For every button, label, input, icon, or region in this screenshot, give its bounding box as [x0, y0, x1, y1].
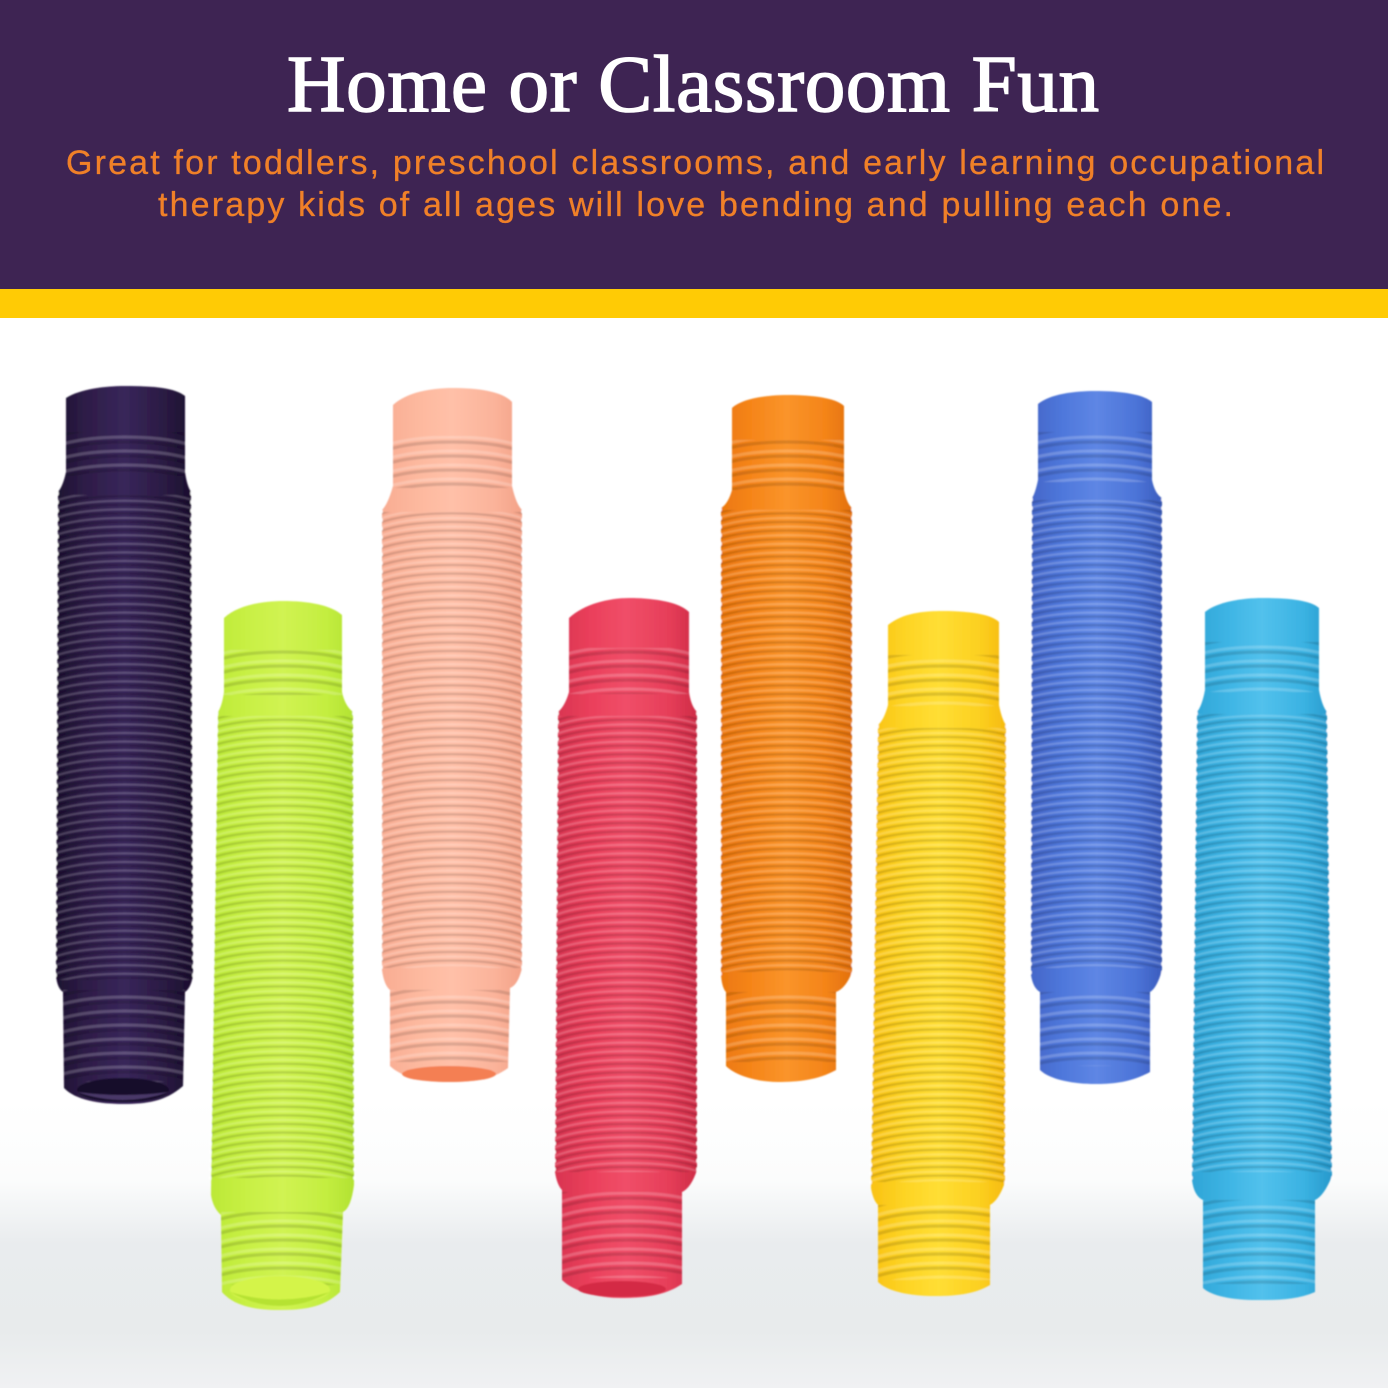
subtitle: therapy kids of all ages will love bending and pulling each one. — [158, 186, 1233, 224]
title: Home or Classroom Fun — [287, 39, 1099, 129]
subtitle: Great for toddlers, preschool classrooms, and early learning occupational — [66, 144, 1324, 182]
tube: lime green — [210, 601, 354, 1310]
tube: sky blue — [1192, 598, 1332, 1300]
tube: red — [554, 598, 698, 1298]
tube: yellow — [870, 611, 1006, 1296]
yellow stripe — [0, 289, 1388, 318]
tube: orange — [720, 395, 852, 1082]
tube: dark purple — [56, 386, 194, 1104]
tube: peach — [382, 388, 522, 1082]
subtitle — [66, 144, 1324, 224]
header banner — [0, 0, 1388, 289]
tube: blue — [1030, 391, 1162, 1084]
background — [0, 318, 1388, 1388]
